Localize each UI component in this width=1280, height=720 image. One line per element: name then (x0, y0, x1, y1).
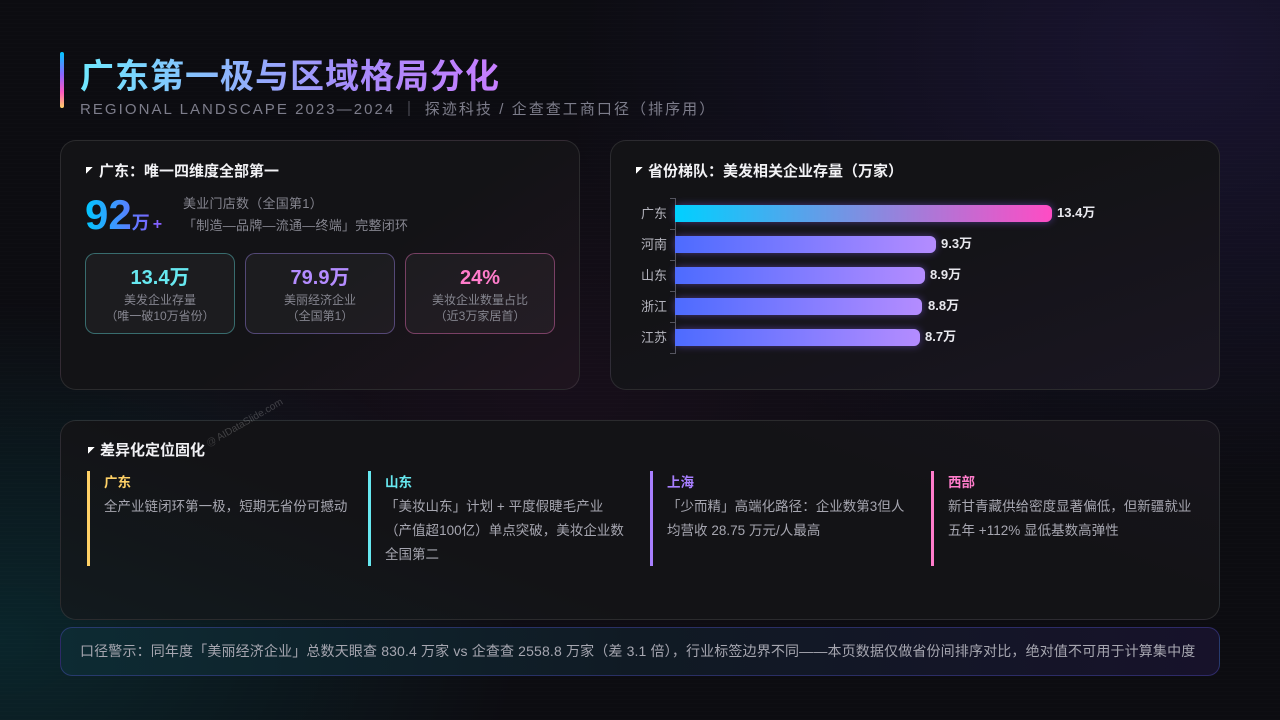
bar chart: 8.8万 (928, 298, 959, 313)
caveat callout (60, 627, 1220, 676)
bar chart: 8.7万 (925, 329, 956, 344)
stat card: 24%: 24% (460, 267, 500, 289)
column: Shandong: （产值超100亿）单点突破，美妆企业数 (385, 523, 624, 538)
column: Shandong: 山东 (385, 475, 412, 490)
panel heading: positioning: 差异化定位固化 (100, 442, 205, 459)
watermark: Copyright @ AIDataSlide.com (165, 397, 285, 472)
column: Shanghai: 均营收 28.75 万元/人最高 (667, 523, 820, 538)
panel heading: Guangdong: 广东：唯一四维度全部第一 (99, 163, 279, 180)
column: West (931, 471, 1191, 566)
stat card: 79.9万: （全国第1） (287, 309, 353, 323)
bar chart: 9.3万 (941, 236, 972, 251)
stat card: 24% (405, 253, 555, 334)
stat card: 13.4万: 13.4万 (131, 267, 189, 289)
panel: province ranking (610, 140, 1220, 390)
stat card: 24%: （近3万家居首） (435, 309, 525, 323)
column: Shandong: 「美妆山东」计划 + 平度假睫毛产业 (385, 499, 603, 514)
stat card: 13.4万 (85, 253, 235, 334)
column: Guangdong: 全产业链闭环第一极，短期无省份可撼动 (104, 499, 347, 514)
stat card: 79.9万: 79.9万 (291, 267, 349, 289)
column: West: 西部 (948, 475, 975, 490)
column: Shandong (368, 471, 628, 566)
panel: Guangdong (60, 140, 580, 390)
stat card: 24%: 美妆企业数量占比 (432, 293, 528, 307)
subtitle: REGIONAL LANDSCAPE 2023—2024 ｜ 探迹科技 / 企查查工商口径（排序用） (80, 101, 716, 118)
stat card: 13.4万: （唯一破10万省份） (105, 309, 215, 323)
bar chart: 13.4万 (1057, 205, 1095, 220)
title accent bar (60, 52, 64, 108)
column: Shanghai (650, 471, 910, 566)
bar chart: 江苏 (641, 330, 667, 345)
column: Shanghai: 上海 (667, 475, 694, 490)
column: Guangdong: 广东 (104, 475, 131, 490)
column: Shanghai: 「少而精」高端化路径：企业数第3但人 (667, 499, 904, 514)
column: West: 新甘青藏供给密度显著偏低，但新疆就业 (948, 499, 1191, 514)
bar chart: 浙江 (641, 299, 667, 314)
title: 广东第一极与区域格局分化 (80, 58, 500, 96)
stat card: 13.4万: 美发企业存量 (124, 293, 196, 307)
panel: differentiated positioning (60, 420, 1220, 620)
column: Guangdong (87, 471, 347, 566)
bar chart: 8.9万 (930, 267, 961, 282)
panel heading icon (88, 447, 95, 454)
column: West: 五年 +112% 显低基数高弹性 (948, 523, 1119, 538)
description text (183, 196, 408, 233)
stat card: 79.9万: 美丽经济企业 (284, 293, 356, 307)
panel heading icon (86, 167, 93, 174)
bar chart: 河南 (641, 237, 667, 252)
stat card: 79.9万 (245, 253, 395, 334)
bar chart: 广东 (641, 206, 667, 221)
description text: 美业门店数（全国第1） (183, 196, 323, 211)
panel heading: province ranking: 省份梯队：美发相关企业存量（万家） (648, 163, 903, 180)
column: Shandong: 全国第二 (385, 547, 439, 562)
panel heading icon (636, 167, 643, 174)
caveat callout: 口径警示：同年度「美丽经济企业」总数天眼查 830.4 万家 vs 企查查 2558.8 万家（差 3.1 倍），行业标签边界不同——本页数据仅做省份间排序对比，绝对值不可用于计算集中度 (80, 643, 1195, 659)
bar chart: 山东 (641, 268, 667, 283)
description text: 「制造—品牌—流通—终端」完整闭环 (183, 218, 408, 233)
